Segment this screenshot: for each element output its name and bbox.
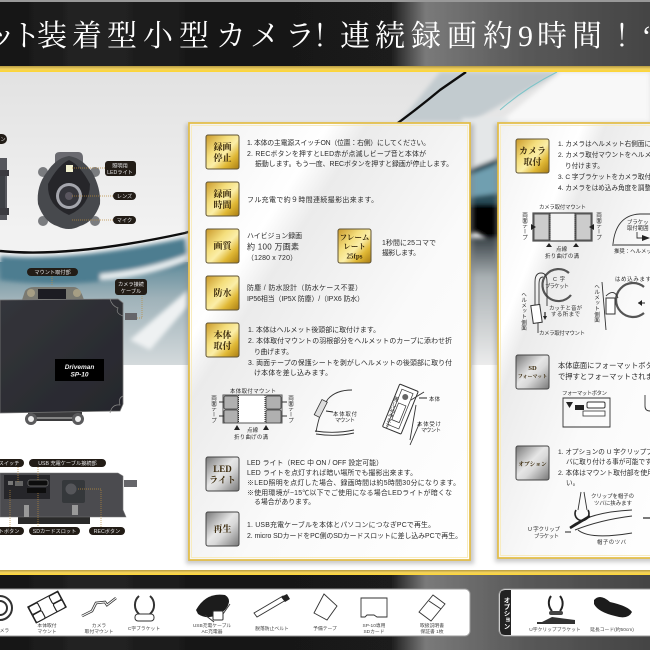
section: body mounting: 取付 (213, 340, 232, 351)
section: SD format: SD (528, 365, 537, 372)
label: lens (side view) (0, 134, 7, 144)
product photo: camera side view (0, 158, 9, 220)
logo plate: Driveman (65, 364, 94, 371)
section: LED light: ライト (209, 475, 236, 485)
item: manual (419, 595, 445, 635)
section: image quality: ハイビジョン録画 (247, 231, 302, 240)
item: USB cable and charger: USB充電ケーブル (193, 622, 231, 629)
label: mic: マイク (117, 217, 132, 224)
diagram: inserting the unit: 差し込みます (383, 394, 400, 429)
diagram: camera fitting: はめ込みます (615, 275, 650, 283)
product photo: main unit (0, 287, 137, 425)
diagram: C bracket: ブラケット (545, 282, 569, 290)
section: recording stop: 振動します。もう一度、RECボタンを押すと録画が停止します。 (255, 159, 453, 168)
white area between the panels (472, 365, 498, 570)
item: camera mount (82, 598, 116, 635)
section: image quality (206, 229, 302, 263)
diagram: U clip on cap: クリップを帽子の (591, 492, 634, 500)
item: SD card: SDカード (363, 629, 385, 635)
label: camera cable: カメラ接続 (118, 280, 145, 288)
item: SD card: SP-10専用 (363, 622, 386, 629)
section: option: オプション (518, 460, 547, 468)
section: recording stop (206, 135, 453, 169)
option tab: オプション (502, 596, 510, 629)
section: body mounting: 1. 本体はヘルメット後頭部に取付けます。 (248, 325, 380, 334)
section: recording time: 録画 (213, 188, 232, 199)
section: LED light: LED ライト（REC 中 ON / OFF 設定可能） (247, 458, 383, 467)
callouts: side view parts (0, 459, 125, 535)
label: LED light: LEDライト (107, 169, 133, 176)
section: LED light (206, 457, 460, 506)
diagram: C bracket: カッチと音が (549, 304, 583, 312)
diagram: body mount: 点線 (247, 426, 259, 434)
label: mount: マウント取付部 (34, 268, 71, 276)
section: recording time (206, 182, 378, 216)
item: camera mount: カメラ (92, 623, 106, 629)
diagram: helmet mount: マウント (335, 416, 355, 424)
label: lens (side view): ン (0, 137, 6, 143)
label: lens: レンズ (117, 192, 132, 200)
section: playback: 1. USB充電ケーブルを本体とパソコンにつなぎPCで再生。 (247, 520, 435, 529)
section: waterproof: 防水 (213, 287, 232, 298)
callouts: camera front parts (72, 161, 136, 224)
section: playback: 2. micro SDカードをPC側のSDカードスロットに差し込みPCで再生。 (247, 531, 462, 540)
item: U clip bracket (529, 596, 581, 633)
diagram: U clip on cap: ツバに挟みます (594, 499, 632, 507)
item: spare tape: 予備テープ (313, 625, 337, 632)
item: manual: 保証書 1枚 (420, 628, 444, 635)
section: image quality: 約 100 万画素 (247, 242, 299, 252)
section: recording stop: 1. 本体の主電源スイッチON（位置：右側）にしてください。 (247, 138, 430, 147)
diagram: body mount (210, 387, 294, 441)
diagram: camera mount (521, 203, 602, 260)
label: REC button: RECボタン (94, 527, 120, 535)
label: SD slot: SDカードスロット (33, 528, 76, 535)
diagram: body mount: 両面テープ (287, 395, 294, 423)
option tab (500, 590, 511, 635)
swoosh between panels (462, 118, 508, 368)
item: body mount (28, 591, 66, 635)
diagram: C bracket: C 字 (553, 276, 566, 283)
section: recording stop: 2. RECボタンを押すとLED赤が点滅しビープ音と本体が (247, 149, 426, 158)
panel: accessories (0, 589, 470, 636)
section: recording time: 時間 (213, 199, 232, 210)
section: LED light: ※使用環境が−15℃以下でご使用になる場合LEDライトが暗くな (247, 488, 452, 497)
section: playback (206, 512, 462, 546)
diagram: body mount: 折り曲げの溝 (234, 433, 269, 441)
background swoosh (0, 70, 650, 368)
panel: optional accessories (499, 589, 650, 636)
section: LED light: LED ライトを点灯すれば暗い場所でも撮影出来ます。 (247, 468, 417, 477)
section: frame rate (338, 229, 436, 263)
diagram: helmet mount (314, 390, 358, 435)
white area below the background image (0, 365, 186, 570)
diagram: C bracket: ヘルメット側面 (520, 291, 527, 332)
item: USB cable and charger (193, 595, 231, 635)
section: recording stop: 録画 (213, 141, 232, 152)
section: LED light: ※LED照明を点灯した場合、録画時間は約5時間30分になります。 (247, 478, 460, 487)
diagram: U clip on cap: ブラケット (534, 532, 559, 540)
diagram: format button (562, 389, 650, 427)
diagram: U clip on cap: U 字クリップ (528, 526, 561, 533)
item: body mount: マウント (37, 628, 57, 635)
section: camera mounting: 取付 (523, 156, 542, 167)
item: manual: 取扱説明書 (420, 622, 444, 629)
diagram: U clip on cap: 帽子のツバ (597, 538, 627, 546)
section: frame rate: レート (343, 242, 366, 251)
diagram: camera mount: 折り曲げの溝 (545, 252, 580, 260)
section: camera mounting: り付けます。 (565, 161, 604, 170)
diagram: helmet bracket range (612, 214, 650, 255)
item: camera mount: 取付マウント (85, 628, 114, 635)
logo plate (55, 359, 104, 381)
section: frame rate: 25fps (347, 252, 363, 260)
section: body mounting: け本体を差し込みます。 (254, 368, 332, 377)
diagram: camera fitting: ヘルメット側面 (593, 283, 600, 324)
section: body mounting: り曲げます。 (254, 347, 293, 356)
section: option (516, 446, 650, 487)
section: body mounting: 3. 両面テープの保護シートを剥がしヘルメットの後頭部に取り付 (248, 358, 452, 367)
diagram: helmet bracket range: 取付範囲 (627, 224, 649, 232)
title banner (0, 0, 650, 72)
section: camera mounting (516, 139, 650, 192)
label: LED light (105, 161, 136, 176)
section: frame rate: フレーム (340, 233, 369, 242)
section: body mounting: 本体 (213, 329, 232, 340)
section: playback: 再生 (213, 523, 232, 534)
section: body mounting (206, 323, 452, 377)
item: C bracket: C字ブラケット (128, 625, 160, 632)
section: LED light: LED (213, 464, 232, 474)
diagram: body mount: 両面テープ (210, 395, 217, 423)
section: LED light: る場合があります。 (254, 497, 315, 506)
diagram: camera mount: 両面テープ (521, 212, 528, 240)
item: camera (0, 596, 12, 634)
diagram: camera mount: カメラ取付マウント (539, 203, 586, 211)
item: SD card (361, 598, 387, 635)
item: extension cord: 延長コード(約50cm) (590, 626, 634, 633)
section: image quality: （1280 x 720） (247, 254, 297, 262)
item: U clip bracket: U字クリップブラケット (529, 626, 581, 633)
diagram: body mount: 本体取付マウント (230, 387, 276, 395)
item: USB cable and charger: AC充電器 (201, 629, 223, 635)
label: LED light: 照明用 (112, 162, 128, 170)
bottom band (0, 570, 650, 650)
section: SD format: フォーマット (518, 374, 547, 380)
section: SD format (516, 355, 650, 389)
label: USB port: USB 充電ケーブル接続部 (38, 459, 97, 467)
section: frame rate: 1秒間に25コマで (382, 238, 436, 247)
section: image quality: 画質 (213, 240, 232, 251)
product photo: camera front (38, 152, 100, 229)
panel: features (186, 123, 474, 564)
section: body mounting: 2. 本体取付マウントの羽根部分をヘルメットのカーブに添わせ折 (248, 336, 452, 345)
logo plate: SP-10 (70, 372, 89, 378)
item: C bracket (128, 596, 160, 632)
diagram: inserting the unit: マウント (421, 426, 441, 434)
diagram: camera fitting (593, 275, 650, 330)
section: waterproof: 防塵 / 防水設計（防水ケース不要） (247, 283, 362, 292)
diagram: C bracket: カメラ取付マウント (539, 329, 585, 337)
diagram: inserting the unit (382, 384, 441, 445)
section: option: い。 (566, 479, 579, 487)
item: safety belt (254, 594, 290, 632)
diagram: C bracket (520, 269, 585, 337)
callouts: main unit parts (27, 268, 147, 318)
diagram: format button: フォーマットボタン (562, 389, 607, 397)
section: waterproof (206, 276, 364, 310)
label: camera cable: ケーブル (121, 287, 141, 295)
label: camera cable (115, 279, 147, 295)
section: recording stop: 停止 (213, 152, 232, 163)
diagram: inserting the unit: 本体 (429, 395, 441, 403)
diagram: U clip on cap (528, 492, 650, 546)
section: waterproof: IP56相当（IP5X 防塵）/（IPX6 防水） (247, 294, 364, 303)
item: spare tape (313, 594, 337, 632)
item: body mount: 本体取付 (37, 622, 57, 629)
section: recording time: フル充電で約９時間連続撮影出来ます。 (247, 195, 378, 204)
diagram: inserting the unit: 本体受け (417, 420, 441, 428)
diagram: camera mount: 両面テープ (595, 212, 602, 240)
section: frame rate: 撮影します。 (382, 248, 420, 257)
panel: installation (495, 123, 650, 562)
section: camera mounting: カメラ (519, 146, 546, 156)
diagram: C bracket: する所まで (551, 310, 580, 318)
diagram: camera mount: 点線 (556, 245, 568, 253)
product photo: unit side view (0, 473, 137, 524)
item: safety belt: 脱落防止ベルト (255, 625, 289, 632)
item: extension cord (590, 597, 634, 633)
diagram: helmet mount: 本体取付 (333, 410, 358, 418)
